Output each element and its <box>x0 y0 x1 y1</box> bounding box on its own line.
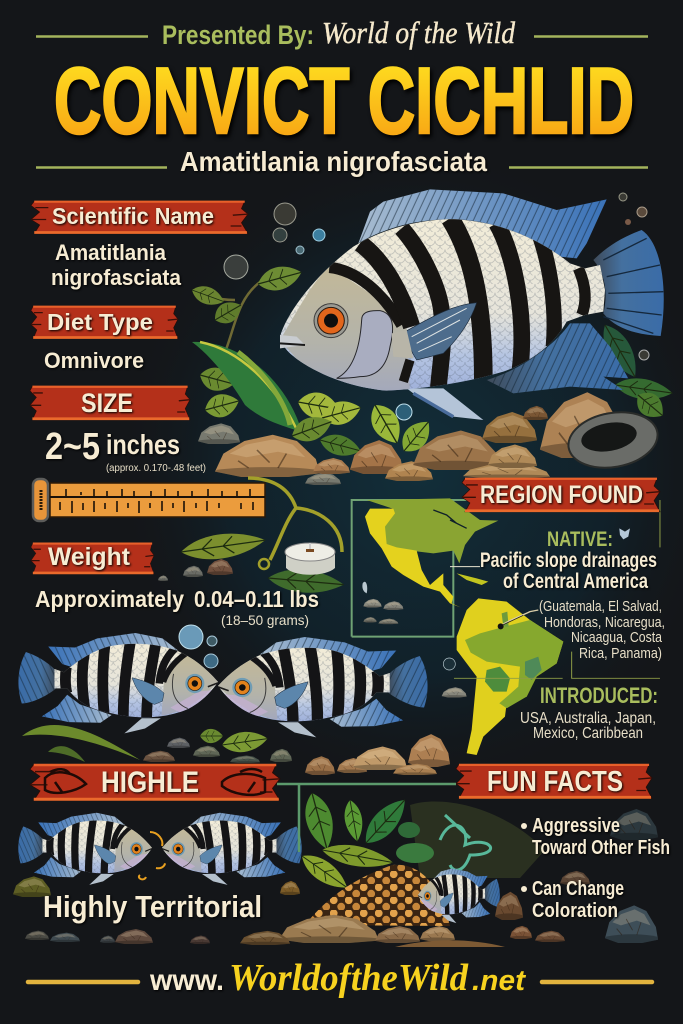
banner: weight <box>31 543 154 574</box>
banner: highle: HIGHLE <box>101 766 199 799</box>
banner: diet type: Diet Type <box>47 309 153 335</box>
icon: banner fish left <box>45 769 86 793</box>
text: size value: (approx. 0.170-.48 feet) <box>106 463 206 474</box>
illustration: two small fish sparring <box>18 812 302 885</box>
text: weight value <box>35 586 319 628</box>
text: introduced range: USA, Australia, Japan, <box>520 710 656 727</box>
text: native range <box>480 528 665 662</box>
text: scientific name: nigrofasciata <box>51 265 182 290</box>
banner: fun facts: FUN FACTS <box>487 766 623 798</box>
text: size value <box>45 426 206 474</box>
banner: size: SIZE <box>81 388 133 418</box>
banner: scientific name: Scientific Name <box>52 203 214 229</box>
banner: highle <box>30 764 280 800</box>
text: introduced range <box>520 683 658 742</box>
subtitle: Amatitlania nigrofasciata <box>180 146 487 177</box>
text: size value: 2~5 <box>45 426 100 468</box>
text: introduced range: Mexico, Caribbean <box>533 725 643 742</box>
rocks and plants under fish <box>22 725 450 775</box>
illustration: plants, eggs and guarding fish <box>240 784 658 947</box>
text: native range: Rica, Panama) <box>579 645 662 662</box>
illustration: two fish facing <box>18 625 428 737</box>
text: weight value: (18–50 grams) <box>221 612 309 628</box>
footer: website: WorldoftheWild <box>229 957 469 999</box>
rocks and tire under main fish <box>198 392 662 485</box>
header: presented by <box>36 15 648 50</box>
illustration: main convict cichlid <box>270 189 664 420</box>
text: fun facts list: Can Change <box>532 878 624 900</box>
illustration: vine, leaves and tin <box>158 478 345 596</box>
footer: website: .net <box>472 965 526 997</box>
text: fun facts list: Aggressive <box>532 815 620 837</box>
text: weight value: Approximately <box>35 586 184 612</box>
text: highly territorial: Highly Territorial <box>43 889 262 924</box>
text: weight value: 0.04–0.11 lbs <box>194 586 319 612</box>
banner: diet type <box>31 306 178 339</box>
footer: website: www. <box>149 964 224 997</box>
text: fun facts list <box>521 815 670 922</box>
text: native range: Nicaaɡua, Costa <box>571 629 663 646</box>
header: presented by: World of the Wild <box>322 15 515 50</box>
map: americas <box>352 498 660 755</box>
banner: weight: Weight <box>48 543 131 571</box>
text: fun facts list: Coloration <box>532 900 618 922</box>
banner: size <box>30 386 190 420</box>
text: size value: inches <box>106 429 180 460</box>
text: scientific name <box>51 240 182 290</box>
text: native range: NATIVE: <box>547 528 613 551</box>
footer: website <box>28 957 652 999</box>
bubbles and plants behind main fish <box>189 193 674 461</box>
icon: ruler <box>33 479 265 521</box>
banner: scientific name <box>31 201 248 234</box>
header: presented by: Presented By: <box>162 20 314 50</box>
text: omnivore: Omnivore <box>44 348 144 373</box>
rocks along bottom left <box>13 876 300 944</box>
banner: region found: REGION FOUND <box>480 481 643 509</box>
text: scientific name: Amatitlania <box>55 240 167 265</box>
